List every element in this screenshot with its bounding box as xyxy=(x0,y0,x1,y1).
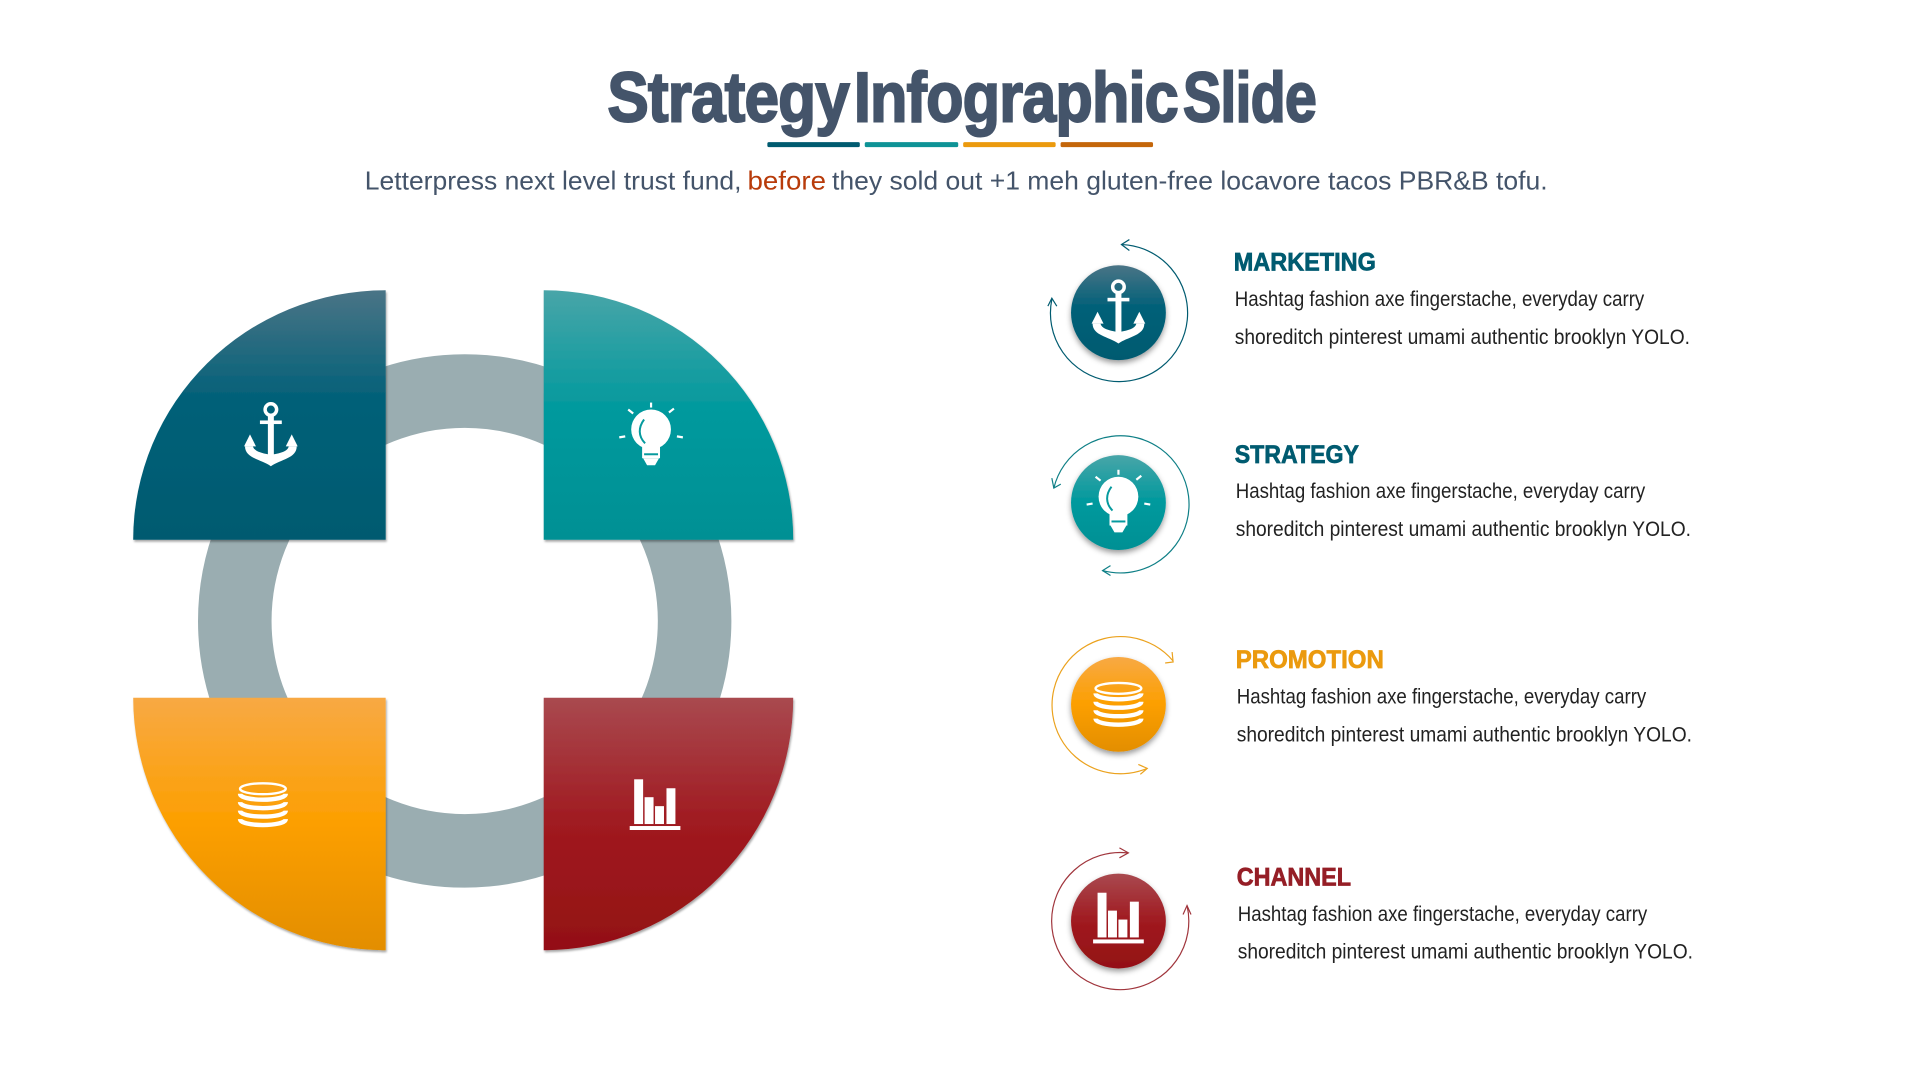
strategy body: shoreditch pinterest umami authentic brooklyn YOLO. xyxy=(1236,517,1691,541)
icon: coin stack xyxy=(240,783,286,825)
ring xyxy=(235,391,695,851)
item: channel xyxy=(1052,848,1693,990)
segment: promotion xyxy=(133,698,386,950)
strategy heading: STRATEGY xyxy=(1235,442,1359,469)
promotion badge xyxy=(1071,657,1166,752)
icon: bar chart xyxy=(630,779,680,830)
channel arrow ring xyxy=(1052,848,1191,990)
marketing arrow ring xyxy=(1048,240,1188,382)
subtitle: they sold out +1 meh gluten-free locavore tacos PBR&B tofu. xyxy=(832,165,1548,195)
title underline bars xyxy=(767,142,1153,147)
channel body xyxy=(1238,902,1693,964)
item: marketing xyxy=(1048,240,1690,382)
subtitle: Letterpress next level trust fund, xyxy=(365,165,742,195)
promotion body xyxy=(1237,685,1692,747)
marketing badge xyxy=(1071,265,1166,360)
item: promotion xyxy=(1052,637,1692,774)
promotion body: shoreditch pinterest umami authentic brooklyn YOLO. xyxy=(1237,723,1692,747)
channel body: Hashtag fashion axe fingerstache, everyday carry xyxy=(1238,902,1648,926)
segment: channel xyxy=(544,698,793,950)
segment: strategy xyxy=(544,290,793,540)
marketing badge icon xyxy=(1092,281,1145,344)
marketing body: Hashtag fashion axe fingerstache, everyday carry xyxy=(1235,287,1645,311)
segment: marketing xyxy=(133,290,386,540)
promotion body: Hashtag fashion axe fingerstache, everyday carry xyxy=(1237,685,1647,709)
title: Strategy xyxy=(607,57,850,136)
strategy arrow ring xyxy=(1052,436,1189,576)
subtitle xyxy=(365,165,1548,195)
icon: light bulb xyxy=(619,403,683,465)
strategy badge icon xyxy=(1087,470,1150,532)
title xyxy=(607,57,1316,136)
title: Infographic xyxy=(854,57,1178,136)
channel heading: CHANNEL xyxy=(1237,865,1351,892)
channel badge icon xyxy=(1093,893,1144,943)
marketing body: shoreditch pinterest umami authentic brooklyn YOLO. xyxy=(1235,325,1690,349)
strategy badge xyxy=(1071,455,1166,550)
item: strategy xyxy=(1052,436,1691,576)
channel body: shoreditch pinterest umami authentic brooklyn YOLO. xyxy=(1238,940,1693,964)
channel badge xyxy=(1071,874,1166,968)
subtitle: before xyxy=(747,165,826,195)
strategy body: Hashtag fashion axe fingerstache, everyday carry xyxy=(1236,479,1646,503)
promotion badge icon xyxy=(1096,683,1141,725)
promotion heading: PROMOTION xyxy=(1236,647,1384,674)
strategy body xyxy=(1236,479,1691,541)
marketing heading: MARKETING xyxy=(1234,249,1376,276)
icon: anchor xyxy=(244,404,298,466)
marketing body xyxy=(1235,287,1690,349)
promotion arrow ring xyxy=(1052,637,1173,774)
title: Slide xyxy=(1183,57,1316,136)
